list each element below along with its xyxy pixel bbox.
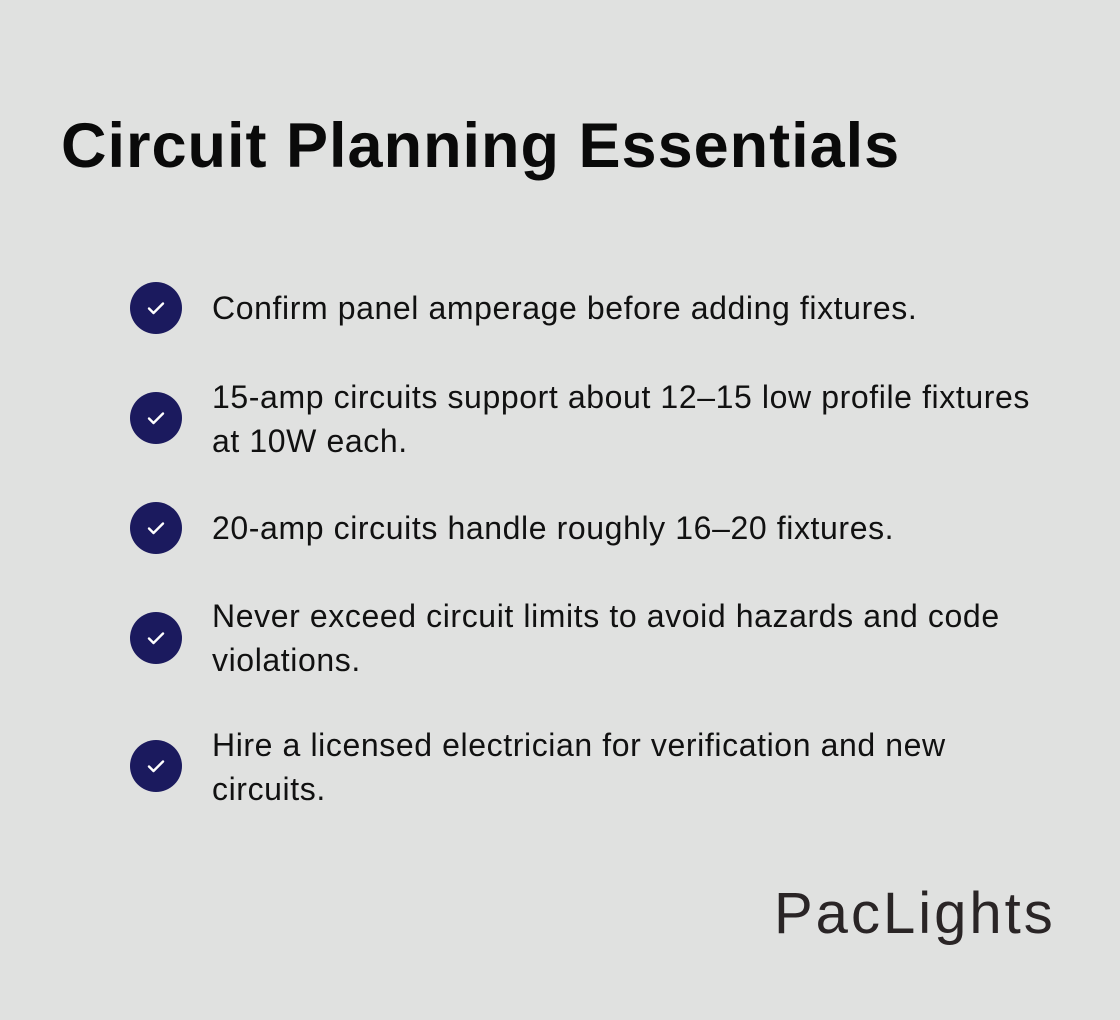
item 3 (130, 502, 894, 554)
item 5 (130, 727, 946, 807)
item 1 (130, 282, 917, 334)
icon: check (130, 502, 182, 554)
icon: check (130, 392, 182, 444)
item 4 (130, 598, 1000, 678)
item 2 (130, 379, 1030, 459)
icon: check (130, 612, 182, 664)
title: Circuit Planning Essentials (61, 111, 900, 181)
text: 20-amp circuits handle roughly 16–20 fixtures. (212, 510, 894, 546)
icon: check (130, 282, 182, 334)
logo: PacLights (774, 881, 1056, 946)
text: Hire a licensed electrician for verification and new circuits. (212, 727, 946, 807)
text: 15-amp circuits support about 12–15 low profile fixtures at 10W each. (212, 379, 1030, 459)
text: Confirm panel amperage before adding fixtures. (212, 290, 917, 326)
text: Never exceed circuit limits to avoid hazards and code violations. (212, 598, 1000, 678)
icon: check (130, 740, 182, 792)
